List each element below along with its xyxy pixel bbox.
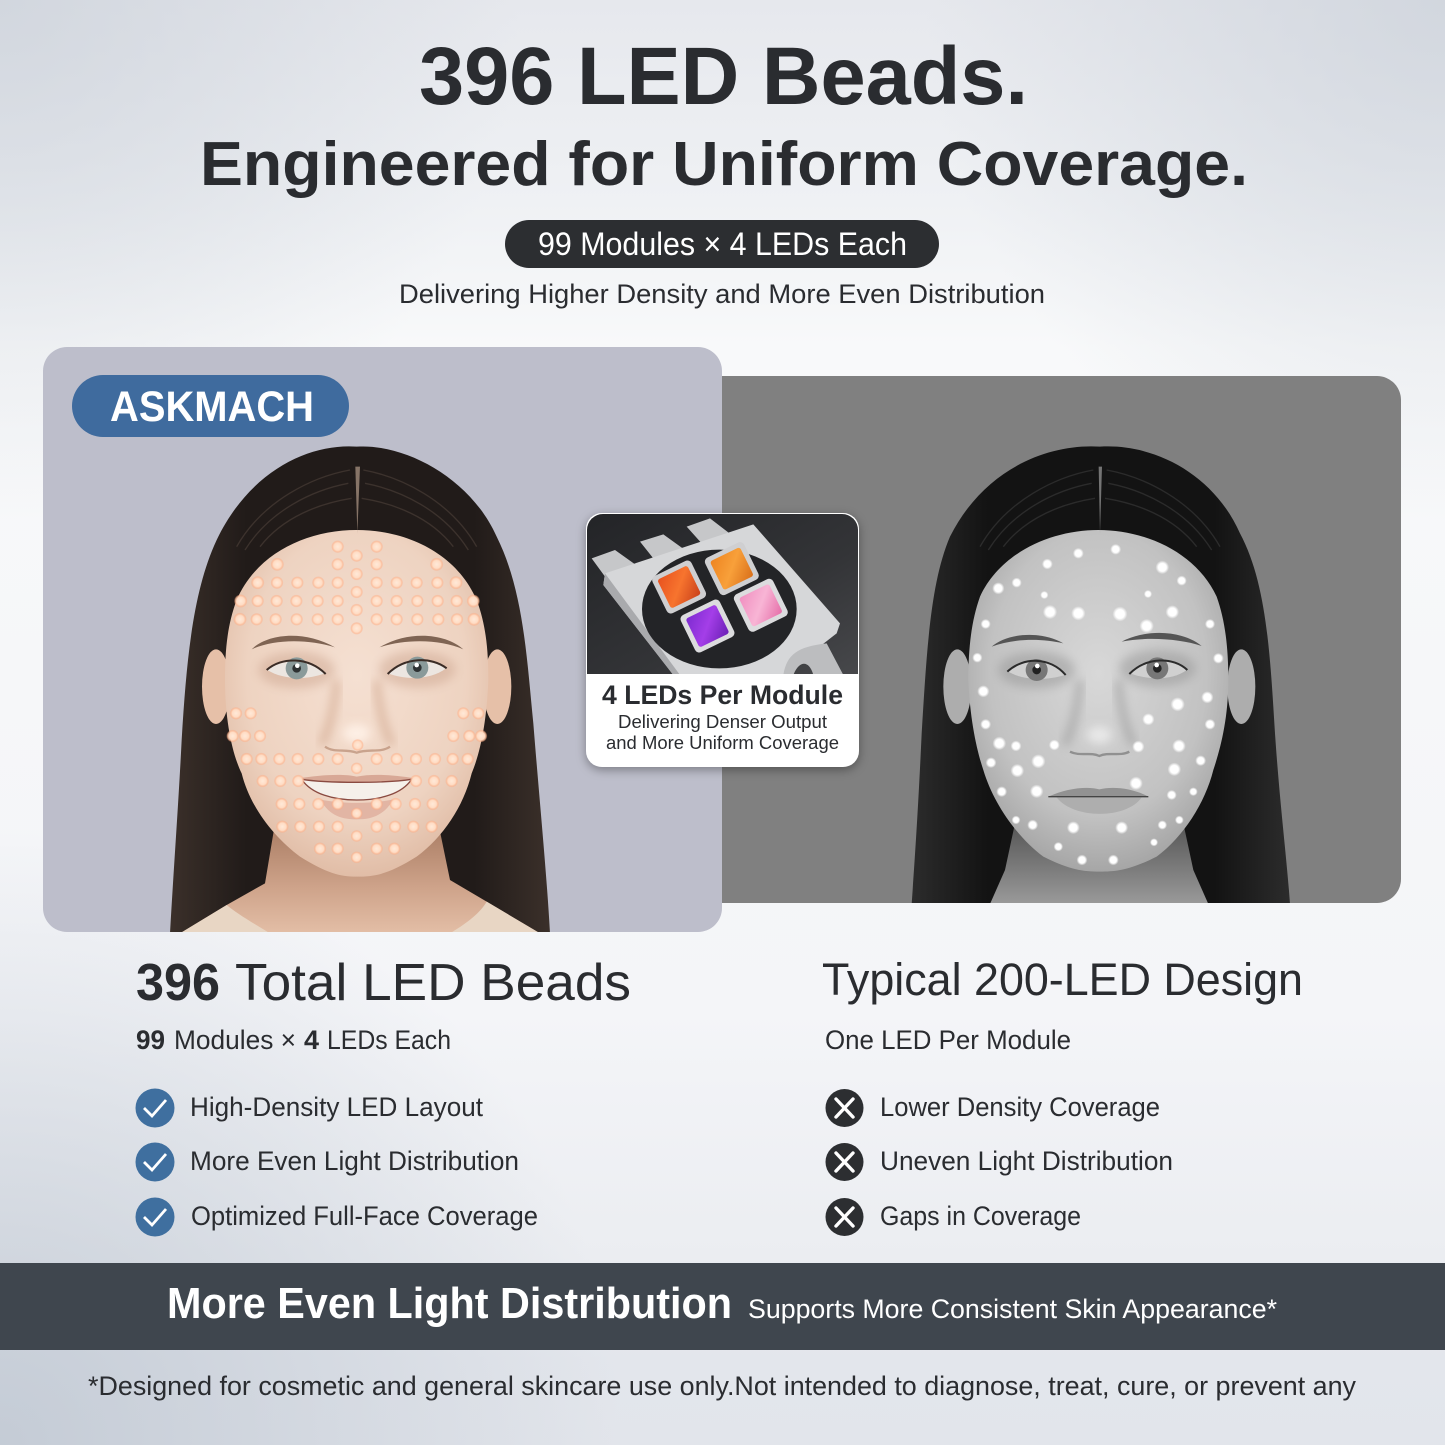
feature text: Optimized Full-Face Coverage: [191, 1201, 538, 1231]
feature text: High-Density LED Layout: [190, 1092, 483, 1122]
panel: ASKMACH: [43, 347, 722, 933]
icon: check: [136, 1142, 174, 1182]
subheading: [136, 1025, 451, 1055]
subheading: Modules ×: [174, 1025, 296, 1055]
limitation text: Gaps in Coverage: [880, 1201, 1081, 1231]
heading: Typical 200-LED Design: [822, 954, 1303, 1005]
brand badge: ASKMACH: [110, 383, 314, 431]
subtitle: Delivering Higher Density and More Even Distribution: [399, 279, 1045, 309]
title: 396 LED Beads.: [419, 31, 1028, 122]
title: Engineered for Uniform Coverage.: [200, 130, 1248, 199]
photo: smiling face with dense LEDs: [170, 446, 550, 933]
column: ASKMACH features: [136, 954, 631, 1236]
illustration: four-LED module: [586, 513, 859, 675]
card caption: Delivering Denser Output: [618, 712, 827, 732]
badge: modules times LEDs: [505, 220, 939, 268]
callout: LED module card: [586, 513, 859, 767]
limitation text: Lower Density Coverage: [880, 1092, 1160, 1122]
feature text: More Even Light Distribution: [190, 1146, 519, 1176]
banner: Supports More Consistent Skin Appearance*: [748, 1294, 1277, 1324]
column: typical design limitations: [822, 954, 1303, 1236]
subheading: 99: [136, 1025, 165, 1055]
heading: 396 total: Total LED Beads: [235, 954, 631, 1012]
badge: modules times LEDs: 99 Modules × 4 LEDs Each: [538, 226, 907, 262]
icon: check: [136, 1198, 174, 1236]
icon: check: [136, 1088, 174, 1128]
photo: monochrome face with sparse LEDs: [912, 446, 1290, 904]
banner: [0, 1263, 1445, 1350]
card caption: 4 LEDs Per Module: [602, 680, 843, 710]
heading: 396 total: 396: [136, 954, 220, 1012]
title: [200, 31, 1248, 199]
panel: typical design: [722, 376, 1401, 903]
brand badge: [72, 375, 349, 437]
icon: cross: [826, 1089, 864, 1127]
icon: cross: [826, 1143, 864, 1181]
subheading: LEDs Each: [327, 1025, 451, 1055]
banner: More Even Light Distribution: [167, 1279, 732, 1328]
disclaimer: *Designed for cosmetic and general skincare use only.Not intended to diagnose, treat, cure, or prevent any: [88, 1371, 1356, 1401]
subheading: One LED Per Module: [825, 1025, 1071, 1055]
card caption: and More Uniform Coverage: [606, 733, 839, 753]
card caption: [602, 680, 843, 753]
subheading: 4: [304, 1025, 319, 1055]
limitation text: Uneven Light Distribution: [880, 1146, 1173, 1176]
icon: cross: [826, 1198, 864, 1236]
